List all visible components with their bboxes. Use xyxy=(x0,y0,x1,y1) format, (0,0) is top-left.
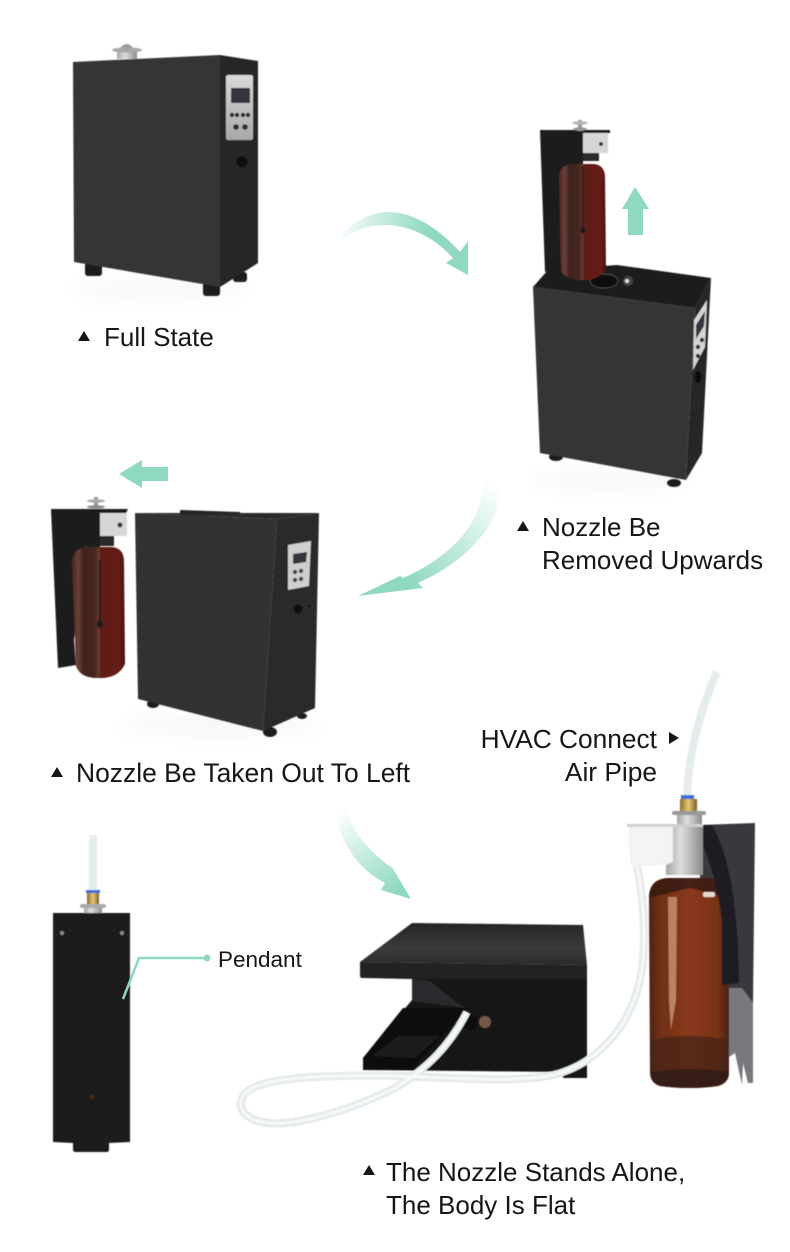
side face xyxy=(263,513,319,731)
caption: nozzle removed upwards xyxy=(517,512,763,575)
control panel xyxy=(693,300,707,370)
side face xyxy=(220,55,258,287)
caption: stands alone: The Nozzle Stands Alone, xyxy=(386,1157,685,1187)
curved arrow 1 xyxy=(332,212,468,275)
looped tube xyxy=(241,866,644,1123)
fitting xyxy=(80,890,106,913)
power socket xyxy=(294,604,310,614)
pendant plate xyxy=(53,835,130,1152)
pipe grommet xyxy=(462,1014,478,1030)
arrow left xyxy=(119,460,168,488)
nozzle head xyxy=(86,497,127,550)
bottle highlight xyxy=(668,897,677,1030)
bottle shoulder shade xyxy=(649,878,729,898)
nozzle head xyxy=(572,120,608,165)
feet xyxy=(147,700,307,737)
front face xyxy=(73,55,220,287)
pendant callout xyxy=(123,947,303,999)
cavity tray xyxy=(363,1008,467,1070)
device: full state xyxy=(73,44,258,296)
front lip xyxy=(360,962,587,979)
nozzle cap xyxy=(112,44,142,59)
bottle xyxy=(559,164,606,280)
back edge xyxy=(180,510,241,516)
indicator light xyxy=(479,1016,491,1028)
caption: nozzle taken out to left: Nozzle Be Taken Out To Left xyxy=(76,758,411,788)
caption: HVAC air pipe xyxy=(481,724,679,787)
power socket xyxy=(694,371,702,383)
top face xyxy=(360,923,587,965)
tray floor xyxy=(372,1036,440,1058)
feet xyxy=(549,453,681,487)
inner wall xyxy=(412,979,467,1008)
caption: HVAC air pipe: HVAC Connect xyxy=(481,724,658,754)
feet xyxy=(85,262,247,296)
bracket xyxy=(540,130,610,272)
liquid level xyxy=(650,1036,729,1088)
plate xyxy=(53,913,130,1152)
white valve block xyxy=(630,828,672,865)
lower plate xyxy=(729,988,753,1085)
top lip xyxy=(135,513,319,519)
bracket xyxy=(51,509,128,668)
pendant callout: Pendant xyxy=(218,947,303,972)
lower hole xyxy=(90,1095,94,1099)
caption: full state: Full State xyxy=(104,322,214,352)
control panel xyxy=(288,541,311,590)
back plate xyxy=(700,823,755,1003)
tube highlight xyxy=(241,866,644,1123)
front body xyxy=(363,978,587,1078)
front face xyxy=(533,287,695,480)
caption: stands alone: The Body Is Flat xyxy=(386,1190,576,1220)
dip tube xyxy=(97,560,103,628)
bottle xyxy=(72,547,125,678)
air tube xyxy=(89,835,97,891)
device: nozzle taken out to left xyxy=(51,497,319,737)
front face xyxy=(135,513,277,731)
top plate xyxy=(627,824,703,827)
screws xyxy=(60,931,124,935)
flat body xyxy=(360,923,587,1078)
upper air pipe xyxy=(687,672,717,798)
bottle specular xyxy=(703,892,715,897)
bracket cover xyxy=(700,825,739,985)
arrow up xyxy=(622,187,649,235)
power socket xyxy=(236,156,252,168)
pipe fitting xyxy=(672,795,706,825)
bottle base shade xyxy=(651,1069,729,1088)
side face xyxy=(686,278,711,480)
amber bottle xyxy=(649,878,729,1088)
caption: nozzle removed upwards: Nozzle Be xyxy=(542,512,660,542)
curved arrow 3 xyxy=(335,810,411,899)
control panel xyxy=(226,75,253,140)
caption: nozzle removed upwards: Removed Upwards xyxy=(542,545,763,575)
device: nozzle removed upwards xyxy=(533,120,711,487)
steel collar xyxy=(666,827,703,875)
top face xyxy=(533,265,711,308)
caption: HVAC air pipe: Air Pipe xyxy=(565,757,657,787)
air pipe loop xyxy=(241,866,644,1123)
dip tube xyxy=(581,166,585,234)
floor shadows xyxy=(70,281,690,735)
caption: stands alone xyxy=(363,1157,685,1220)
standalone nozzle xyxy=(627,672,755,1088)
socket opening xyxy=(590,274,633,288)
curved arrow 2 xyxy=(358,482,502,596)
